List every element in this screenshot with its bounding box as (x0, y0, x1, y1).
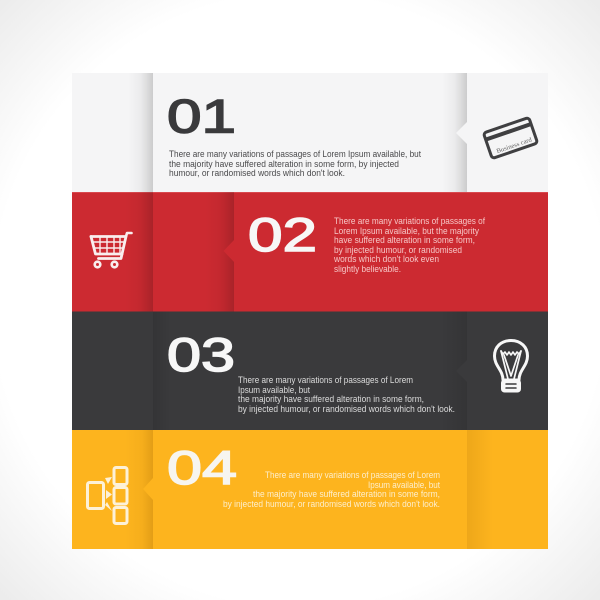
text block: 04 description: the majority have suffered alteration in some form, (253, 489, 440, 499)
text block: 01 description: the majority have suffered alteration in some form, by injected (169, 159, 399, 169)
icon: business card: Business card (496, 136, 534, 155)
text block: 04 description: Ipsum available, but (368, 480, 441, 490)
text block: 03 description: There are many variations of passages of Lorem (238, 375, 413, 385)
icon: business card (483, 117, 538, 159)
text block: 03 description: by injected humour, or randomised words which don't look. (238, 404, 455, 414)
text block: 04 description: by injected humour, or randomised words which don't look. (223, 499, 440, 509)
notch: 01 pointer (456, 122, 467, 144)
notch: 04 pointer (143, 478, 153, 500)
panel: 03 dark band (72, 312, 548, 430)
text block: 04 description: There are many variations of passages of Lorem (265, 470, 440, 480)
text block: 02 description: by injected humour, or randomised (334, 245, 462, 255)
notch: 03 pointer (456, 360, 467, 382)
number: 04: 04 (167, 441, 237, 494)
number: 02: 02 (248, 208, 317, 261)
text block: 02 description: There are many variations of passages of (334, 216, 486, 226)
number: 03: 03 (167, 328, 235, 381)
text block: 02 description: slightly believable. (334, 264, 401, 274)
text block: 01 description (169, 149, 422, 178)
text block: 02 description: have suffered alteration in some form, (334, 235, 475, 245)
text block: 01 description: humour, or randomised words which don't look. (169, 168, 345, 178)
panel: 01 white band (72, 73, 548, 192)
icon: shopping cart (91, 233, 132, 267)
notch: 02 pointer (224, 240, 234, 262)
icon: network diagram (88, 468, 127, 524)
text block: 03 description (238, 375, 455, 414)
number: 01: 01 (167, 90, 236, 142)
icon: light bulb (494, 340, 528, 392)
text block: 02 description: Lorem Ipsum available, but the majority (334, 226, 480, 236)
text block: 03 description: Ipsum available, but (238, 385, 311, 395)
text block: 01 description: There are many variations of passages of Lorem Ipsum available, but (169, 149, 422, 159)
text block: 02 description: words which don't look even (333, 254, 439, 264)
text block: 03 description: the majority have suffered alteration in some form, (238, 394, 424, 404)
text block: 04 description (223, 470, 441, 509)
text block: 02 description (333, 216, 486, 274)
panel: 04 yellow band (72, 430, 548, 549)
panel: 02 red band (72, 192, 548, 312)
